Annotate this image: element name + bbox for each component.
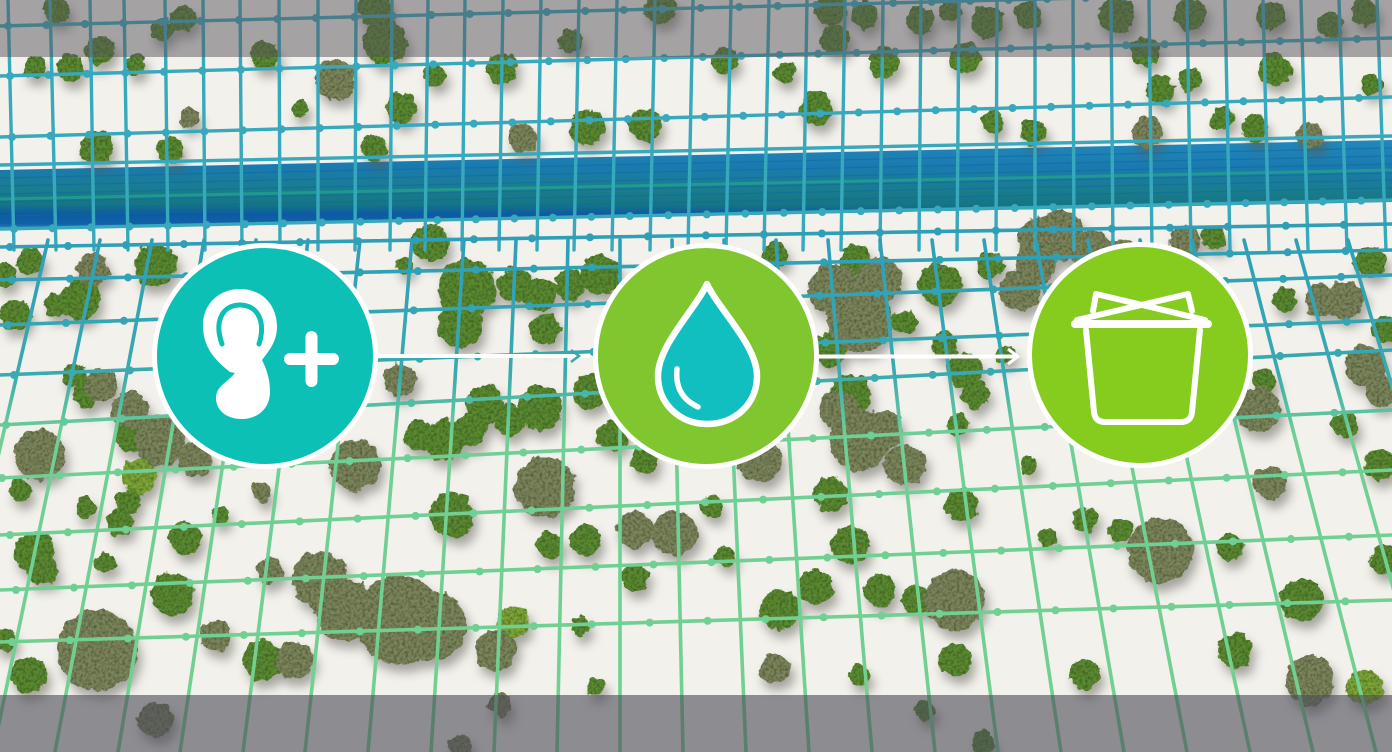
dense blue net band xyxy=(0,140,1392,230)
icon: tied bucket in lime circle xyxy=(1030,244,1250,466)
top grey overlay strip xyxy=(0,0,1392,57)
bottom grey overlay strip xyxy=(0,695,1392,752)
arrow: second to third step xyxy=(818,349,1018,364)
upper teal net xyxy=(0,0,1392,250)
lower net fading from teal to green xyxy=(0,224,1392,752)
icon: ear with plus in teal circle xyxy=(154,246,376,466)
moss: lime clumps xyxy=(124,460,1381,704)
icon: water drop in green circle xyxy=(596,246,816,466)
arrow: first to second step xyxy=(376,350,590,362)
net knots: upper xyxy=(8,0,1392,229)
net knots: lower xyxy=(2,224,1392,642)
